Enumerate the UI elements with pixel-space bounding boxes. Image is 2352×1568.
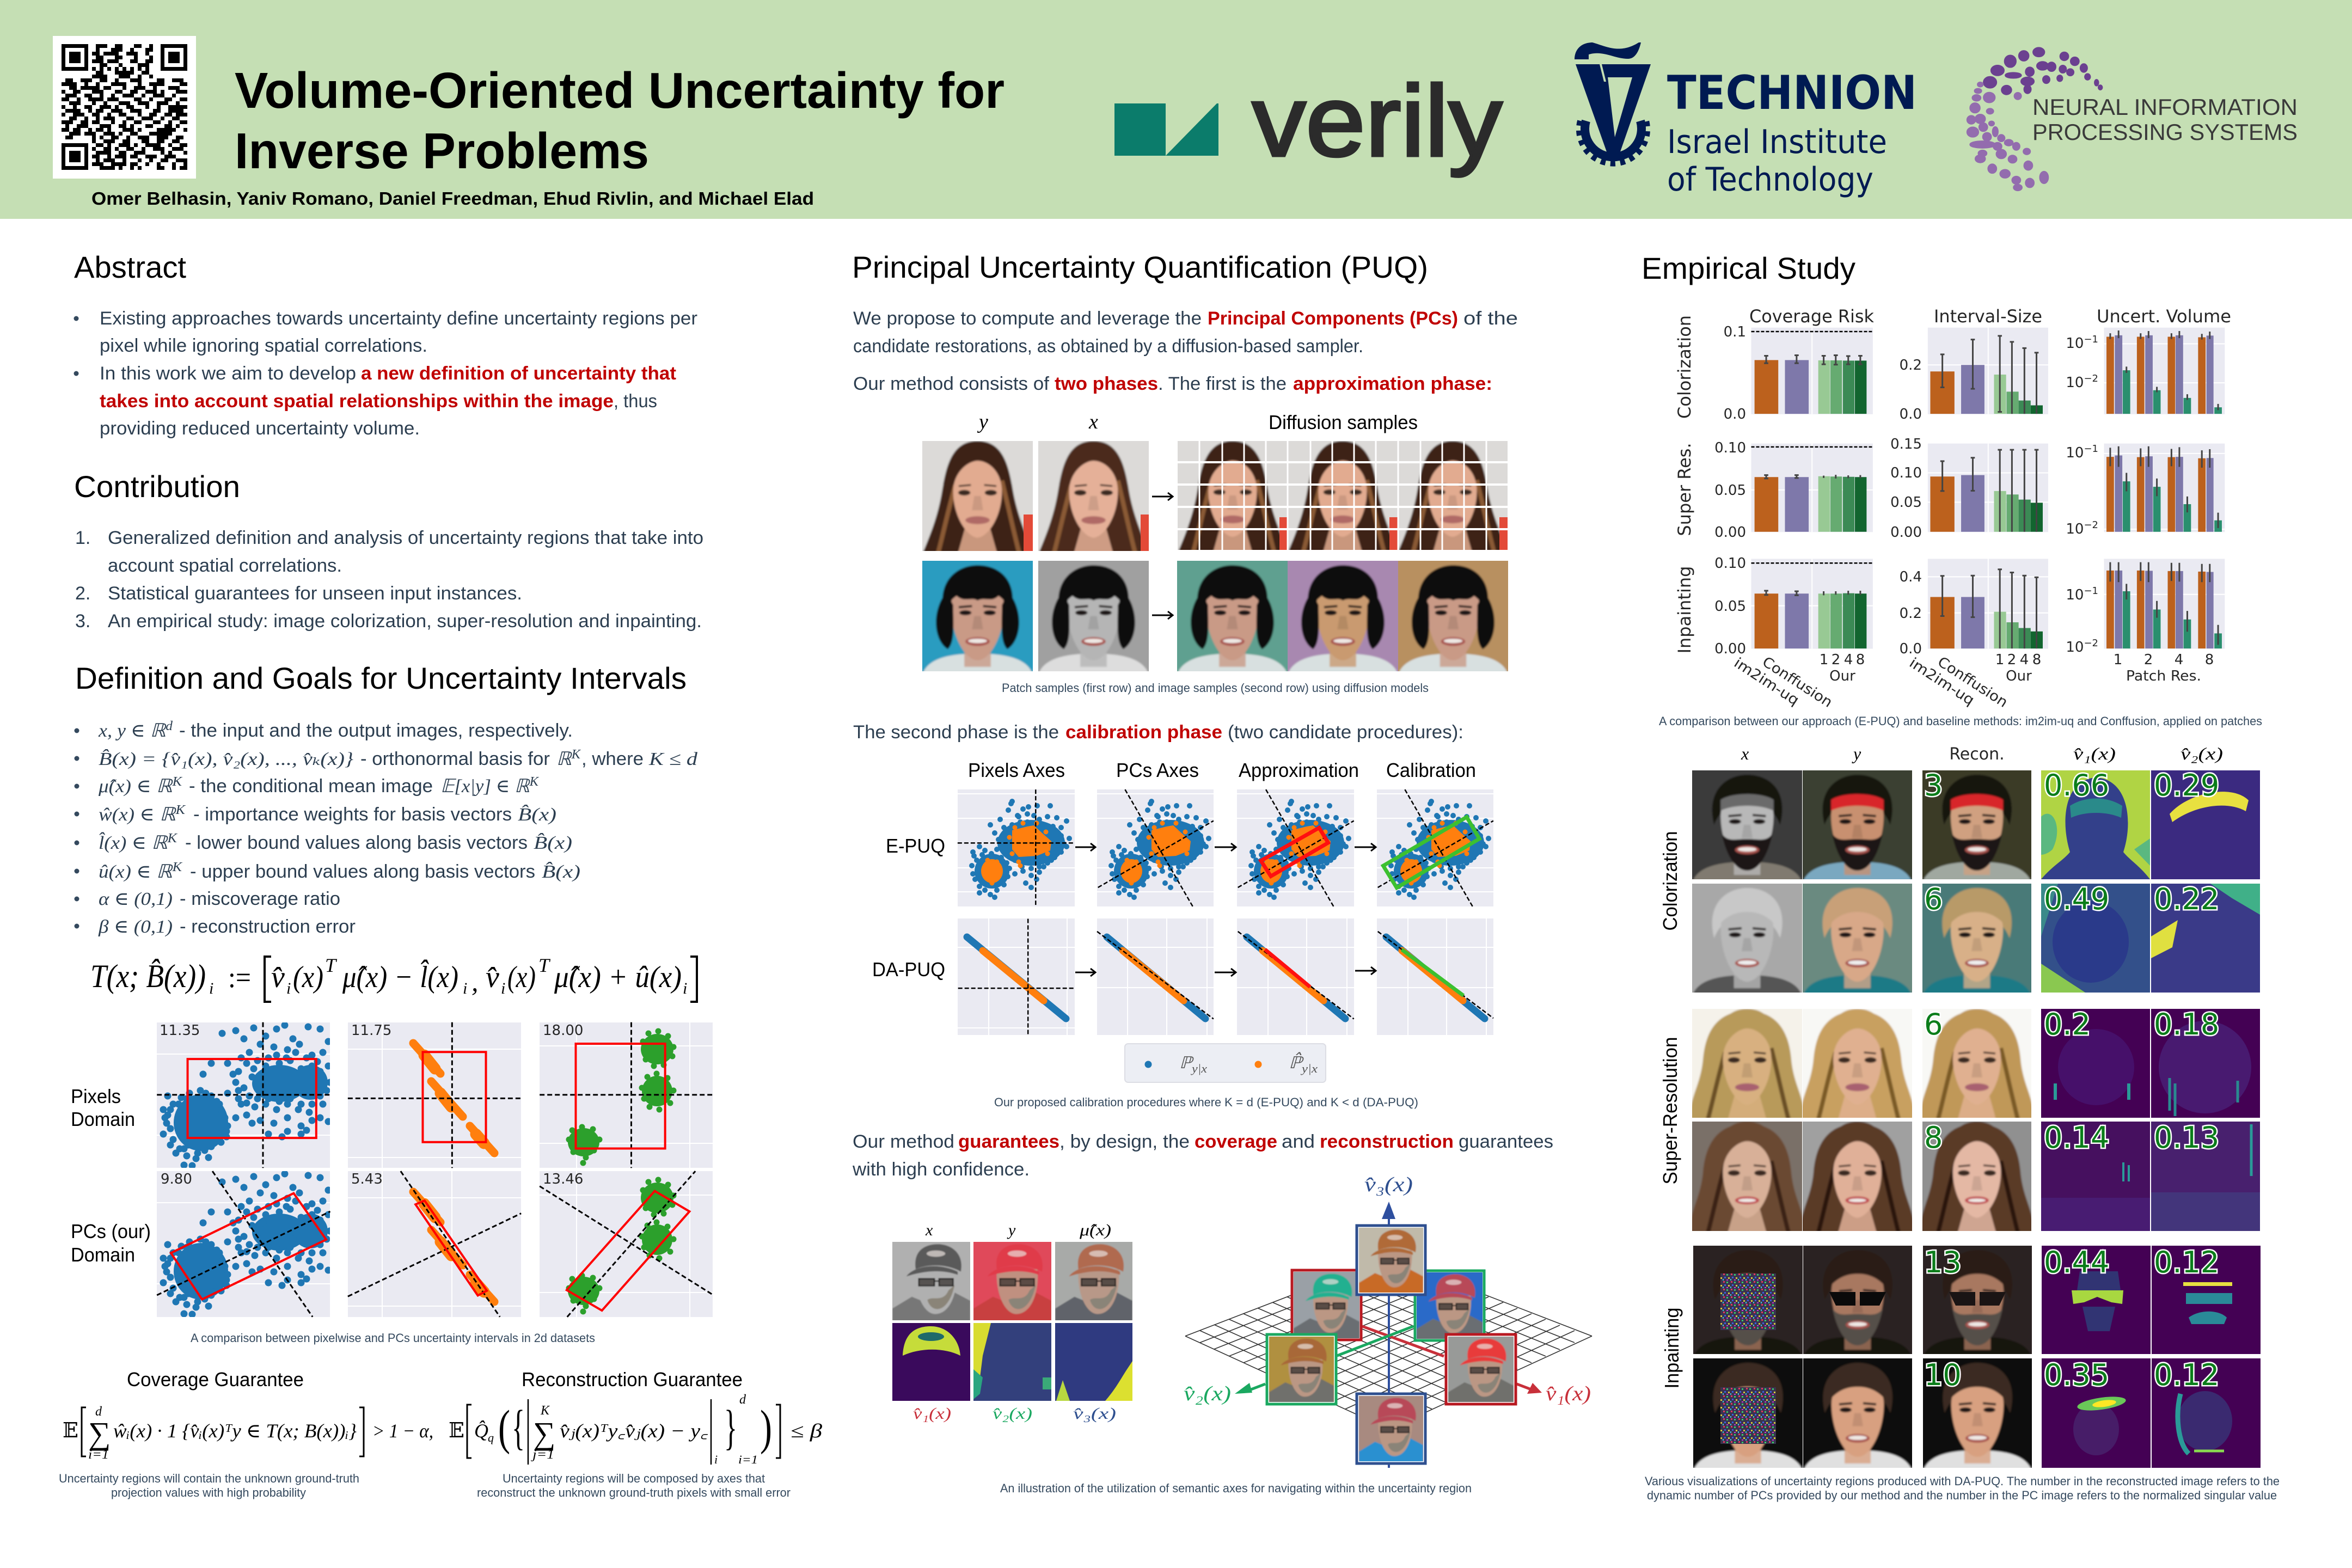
coverage guarantee: i=1 <box>88 1448 109 1462</box>
axis ticks: 0.0 <box>1724 406 1746 422</box>
row labels <box>1659 831 1683 1388</box>
row labels: Colorization <box>1659 831 1681 931</box>
heading: Contribution: Contribution <box>74 469 240 504</box>
axis ticks: 10 <box>2066 375 2084 391</box>
caption: diffusion samples: Patch samples (first row) and image samples (second row) using diffusion models <box>1002 681 1429 695</box>
column titles: Calibration <box>1386 759 1476 781</box>
reconstruction guarantee: } <box>724 1401 737 1455</box>
formula: uncertainty interval: i <box>463 979 467 997</box>
second phase text: calibration phase <box>1065 722 1222 743</box>
column headers <box>1741 744 2223 764</box>
axis labels: v̂₃(x) <box>1364 1173 1413 1196</box>
figure: semantic axes images: x <box>925 1221 933 1239</box>
logo: Technion: TECHNION <box>1667 66 1917 120</box>
overlay numbers: 0.13 <box>2154 1120 2219 1155</box>
definitions list: K ≤ d <box>648 749 698 769</box>
axis ticks: 0.1 <box>1724 324 1746 340</box>
bottom labels: 8 <box>2205 652 2214 668</box>
column labels: Diffusion samples <box>1269 411 1418 433</box>
coverage guarantee: d <box>95 1405 102 1419</box>
definitions list: α ∈ (0,1) <box>99 889 173 909</box>
arrows between panels <box>1075 843 1376 976</box>
formula: uncertainty interval: i <box>286 979 291 997</box>
bottom labels: 4 <box>2175 652 2183 668</box>
second phase text <box>853 722 1463 743</box>
axis labels: v̂₂(x) <box>1184 1382 1231 1405</box>
logo: NeurIPS: NEURAL INFORMATION <box>2032 94 2298 120</box>
definitions list: μ̂(x) ∈ ℝ <box>99 776 166 797</box>
chart: pixels vs PCs scatter grid <box>71 1022 713 1317</box>
contribution list <box>75 528 703 632</box>
guarantee captions: reconstruct the unknown ground-truth pixels with small error <box>477 1486 791 1499</box>
reconstruction guarantee: ( <box>498 1401 510 1455</box>
axis labels: v̂₁(x) <box>1546 1382 1591 1405</box>
abstract text: pixel while ignoring spatial correlations. <box>100 335 427 356</box>
logo: NeurIPS: PROCESSING SYSTEMS <box>2032 119 2298 145</box>
formula: uncertainty interval: v̂ <box>271 960 285 994</box>
overlay numbers: 0.49 <box>2044 882 2109 916</box>
bottom labels: 1 <box>1820 652 1828 668</box>
coverage guarantee: ŵᵢ(x) · 1 {v̂ᵢ(x)ᵀy ∈ T(x; B(x))ᵢ} <box>113 1420 357 1442</box>
caption: calibration <box>994 1095 1418 1109</box>
super-resolution row 1 <box>1689 1006 2260 1121</box>
axis ticks: 0.00 <box>1714 524 1746 541</box>
figure: semantic axes images: μ̂(x) <box>1079 1221 1111 1239</box>
row titles: Super Res. <box>1674 443 1695 536</box>
abstract text: Existing approaches towards uncertainty define uncertainty regions per <box>100 308 697 329</box>
heading: Definition and Goals: Definition and Goals for Uncertainty Intervals <box>75 661 687 695</box>
formula: uncertainty interval: i <box>501 979 505 997</box>
column labels: y <box>977 411 988 433</box>
panel: left column <box>59 250 822 1499</box>
guarantees text: with high confidence. <box>852 1159 1030 1180</box>
axis ticks: 0.00 <box>1890 524 1922 541</box>
overlay numbers: 0.44 <box>2044 1245 2109 1279</box>
axis ticks: 10 <box>2066 521 2084 537</box>
definitions list: - miscoverage ratio <box>180 889 340 909</box>
chart titles: Coverage Risk <box>1749 306 1874 327</box>
axis ticks: 0.0 <box>1900 406 1922 422</box>
bottom labels: 4 <box>1844 652 1853 668</box>
axis ticks: 0.10 <box>1714 555 1746 572</box>
bottom labels: 2 <box>1832 652 1840 668</box>
coverage guarantee: Coverage Guarantee <box>127 1368 304 1391</box>
overlay numbers: 13 <box>1924 1245 1962 1279</box>
axis ticks: 0.10 <box>1890 465 1922 481</box>
guarantees text: guarantees <box>1459 1131 1553 1152</box>
header banner <box>0 0 2352 219</box>
formula: uncertainty interval: μ̂(x) − l̂(x) <box>342 959 458 994</box>
axis ticks: 0.05 <box>1714 482 1746 499</box>
row labels: PCs (our) <box>71 1220 151 1242</box>
photo row 1 <box>919 438 1511 554</box>
definitions list: K <box>571 748 581 762</box>
definitions list: K <box>171 775 183 789</box>
column headers: x <box>1741 744 1749 763</box>
coverage guarantee: > 1 − α, <box>372 1420 433 1442</box>
row labels: Inpainting <box>1661 1308 1683 1388</box>
bottom labels: Conffusion <box>1759 654 1835 711</box>
definitions list: B̂(x) <box>518 804 556 825</box>
caption: DA-PUQ visualizations <box>1645 1474 2280 1502</box>
overlay numbers: 6 <box>1924 1007 1943 1042</box>
caption: calibration: Our proposed calibration procedures where <box>994 1095 1221 1109</box>
arrows <box>1152 493 1173 619</box>
definitions list: , where <box>581 749 644 769</box>
formula: uncertainty interval: T <box>538 954 551 976</box>
definitions list: d <box>166 719 173 733</box>
row labels: Pixels <box>71 1085 121 1107</box>
intro text: candidate restorations, as obtained by a diffusion-based sampler. <box>853 336 1363 357</box>
bottom labels: im2im-uq <box>1906 655 1977 709</box>
panel: middle column <box>852 250 1592 1495</box>
logo: NeurIPS <box>1968 48 2298 190</box>
bottom labels: 1 <box>2114 652 2122 668</box>
guarantees text <box>852 1131 1553 1180</box>
axis ticks: 10 <box>2066 639 2084 656</box>
definitions list: K <box>529 775 540 789</box>
inpainting row 2 <box>1690 1355 2261 1471</box>
definitions list: K <box>167 831 178 846</box>
reconstruction guarantee: j=1 <box>531 1448 554 1462</box>
definitions list: ℝ <box>556 749 571 769</box>
axis ticks: 0.2 <box>1900 357 1922 373</box>
chart: pixels vs PCs scatter grid: 9.80 <box>161 1171 192 1187</box>
bottom labels <box>1731 652 2214 711</box>
abstract text: In this work we aim to develop <box>100 363 356 384</box>
figure: semantic axes images: v̂₁(x) <box>913 1405 951 1423</box>
definitions list: K <box>175 803 186 817</box>
intro text: Principal Components (PCs) <box>1208 308 1458 329</box>
row titles: Inpainting <box>1674 566 1695 653</box>
definitions list: K <box>171 860 183 874</box>
chart titles: Uncert. Volume <box>2097 306 2231 327</box>
definitions list: 𝔼[x|y] ∈ ℝ <box>440 776 528 797</box>
logo: Technion: Israel Institute <box>1667 123 1887 161</box>
axis ticks: −1 <box>2084 334 2098 345</box>
coverage guarantee: ∑ <box>88 1416 111 1451</box>
diagram: uncertainty axes over grid <box>1184 1173 1592 1468</box>
definitions list: - importance weights for basis vectors <box>193 804 512 825</box>
definitions list: - lower bound values along basis vectors <box>185 832 528 853</box>
title: Volume-Oriented Uncertainty for <box>235 62 1004 119</box>
chart: pixels vs PCs scatter grid: 13.46 <box>543 1171 583 1187</box>
axis ticks: 0.00 <box>1714 641 1746 657</box>
definitions list: - the conditional mean image <box>189 776 433 797</box>
row titles <box>1674 315 1695 653</box>
bottom labels: Conffusion <box>1934 654 2011 711</box>
formula: uncertainty interval: := <box>228 961 251 994</box>
guarantee captions: projection values with high probability <box>111 1486 306 1499</box>
definitions list: l̂(x) ∈ ℝ <box>99 833 162 853</box>
reconstruction guarantee: i <box>714 1453 718 1466</box>
abstract text: takes into account spatial relationships within the image <box>100 391 614 412</box>
definitions list: - the input and the output images, respectively. <box>179 720 573 741</box>
overlay numbers: 0.22 <box>2154 882 2219 916</box>
caption: DA-PUQ visualizations: dynamic number of PCs provided by our method and the number in the PC image refers to the normalized singular value <box>1647 1489 2277 1502</box>
contribution list: account spatial correlations. <box>108 555 342 576</box>
second phase text: (two candidate procedures): <box>1228 722 1463 743</box>
reconstruction guarantee: q <box>488 1431 494 1444</box>
axis labels <box>1184 1173 1591 1405</box>
guarantees text: , by design, the <box>1059 1131 1190 1152</box>
overlay numbers: 6 <box>1924 882 1943 916</box>
reconstruction guarantee: K <box>540 1404 550 1418</box>
reconstruction guarantee: 𝔼 <box>449 1419 464 1442</box>
overlay numbers: 0.66 <box>2044 768 2109 803</box>
overlay numbers: 3 <box>1924 768 1943 803</box>
axis ticks: 10 <box>2066 445 2084 461</box>
overlay numbers: 0.12 <box>2154 1358 2219 1392</box>
reconstruction guarantee: ≤ β <box>791 1420 822 1442</box>
guarantee captions: Uncertainty regions will be composed by axes that <box>503 1472 765 1485</box>
logo: Technion: of Technology <box>1667 161 1873 199</box>
reconstruction guarantee: d <box>739 1393 746 1407</box>
QR code <box>53 36 196 179</box>
coverage guarantee <box>63 1368 433 1462</box>
bottom labels: Patch Res. <box>2126 668 2201 684</box>
definitions list: ŵ(x) ∈ ℝ <box>99 805 169 825</box>
overlay numbers: 10 <box>1924 1358 1962 1392</box>
overlay numbers <box>1924 768 2219 1392</box>
chart: pixels vs PCs scatter grid: 11.35 <box>160 1022 200 1039</box>
reconstruction guarantee: ) <box>760 1401 772 1455</box>
column labels <box>977 411 1418 433</box>
bottom labels: 1 <box>1995 652 2004 668</box>
contribution list: An empirical study: image colorization, super-resolution and inpainting. <box>108 611 702 632</box>
formula: uncertainty interval: , <box>471 966 478 997</box>
formula: uncertainty interval: μ̂(x) + û(x) <box>554 960 682 994</box>
column titles <box>968 759 1476 781</box>
caption: DA-PUQ visualizations: Various visualizations of uncertainty regions produced with DA-PUQ. The number in the reconstructed image refers to the <box>1645 1474 2280 1488</box>
column titles: Approximation <box>1239 759 1359 781</box>
column titles: PCs Axes <box>1116 759 1199 781</box>
row labels <box>71 1085 151 1266</box>
overlay numbers: 0.29 <box>2154 768 2219 803</box>
guarantees text: coverage <box>1195 1131 1277 1152</box>
formula: uncertainty interval: i <box>683 979 687 997</box>
legend: ℙ̂ <box>1289 1054 1300 1072</box>
figure: semantic axes images: v̂₃(x) <box>1073 1405 1116 1423</box>
bottom labels: 2 <box>2144 652 2153 668</box>
axis ticks: −2 <box>2084 373 2098 384</box>
contribution list: 3. <box>75 611 90 632</box>
figure: diffusion samples <box>919 411 1511 675</box>
axis ticks: 0.05 <box>1890 494 1922 511</box>
logo: verily <box>1114 65 1503 177</box>
bottom labels: 8 <box>2032 652 2041 668</box>
caption: semantic axes: An illustration of the utilization of semantic axes for navigating within the uncertainty region <box>1000 1481 1472 1495</box>
caption: calibration: K = d (E-PUQ) and K < d (DA-PUQ) <box>1224 1095 1418 1109</box>
row labels: Domain <box>71 1108 135 1130</box>
guarantees text: and <box>1282 1131 1315 1152</box>
axis ticks: 10 <box>2066 335 2084 352</box>
definitions list: - upper bound values along basis vectors <box>190 861 535 882</box>
definitions list: B̂(x) <box>542 861 580 882</box>
formula: uncertainty interval <box>90 954 697 1002</box>
legend <box>1125 1044 1326 1082</box>
guarantee captions <box>59 1472 791 1499</box>
legend: y|x <box>1301 1062 1318 1075</box>
axis ticks: −2 <box>2084 638 2098 649</box>
chart: pixels vs PCs scatter grid: 18.00 <box>543 1022 583 1039</box>
definitions list: B̂(x) <box>534 832 572 853</box>
chart: calibration procedures <box>872 759 1493 1082</box>
contribution list: Statistical guarantees for unseen input instances. <box>108 583 522 604</box>
contribution list: Generalized definition and analysis of uncertainty regions that take into <box>108 528 703 548</box>
heading: PUQ: Principal Uncertainty Quantification (PUQ) <box>852 250 1428 284</box>
definitions list: - reconstruction error <box>180 916 356 937</box>
authors: Omer Belhasin, Yaniv Romano, Daniel Freedman, Ehud Rivlin, and Michael Elad <box>91 188 814 209</box>
guarantees text: Our method <box>853 1131 954 1152</box>
coverage guarantee: 𝔼 <box>63 1419 78 1442</box>
axis ticks: 0.0 <box>1900 641 1922 657</box>
row titles: Colorization <box>1674 315 1695 419</box>
figure: semantic axes images <box>890 1221 1135 1423</box>
intro text: of the <box>1463 308 1518 329</box>
colorization row 1 <box>1689 767 2260 883</box>
bottom labels: Our <box>2006 668 2032 684</box>
axis ticks: 10 <box>2066 587 2084 603</box>
abstract text: a new definition of uncertainty that <box>361 363 676 384</box>
column headers: v̂₂(x) <box>2180 744 2223 763</box>
legend: ℙ <box>1179 1054 1191 1072</box>
colorization row 2 <box>1689 880 2260 996</box>
overlay numbers: 8 <box>1924 1120 1943 1155</box>
heading: Empirical Study: Empirical Study <box>1641 251 1855 285</box>
guarantee captions: Uncertainty regions will contain the unknown ground-truth <box>59 1472 359 1485</box>
formula: uncertainty interval: (x) <box>507 960 536 994</box>
figure: DA-PUQ visualizations <box>1659 744 2261 1471</box>
contribution list: 1. <box>75 528 90 548</box>
bottom labels: Our <box>1829 668 1855 684</box>
intro text: Our method consists of <box>853 373 1050 394</box>
axis ticks: −2 <box>2084 519 2098 531</box>
definitions list: û(x) ∈ ℝ <box>99 862 166 882</box>
formula: uncertainty interval: T <box>325 954 338 976</box>
definitions list: - orthonormal basis for <box>360 749 550 769</box>
axis ticks: 0.2 <box>1900 605 1922 622</box>
bottom labels: 4 <box>2020 652 2029 668</box>
figure: semantic axes images: y <box>1007 1221 1016 1239</box>
definitions list <box>74 719 698 937</box>
row labels: Super-Resolution <box>1659 1037 1681 1185</box>
column titles: Pixels Axes <box>968 759 1065 781</box>
abstract text: providing reduced uncertainty volume. <box>100 418 420 439</box>
intro text <box>853 308 1518 394</box>
image frames <box>1267 1226 1516 1463</box>
column headers: Recon. <box>1949 745 2005 764</box>
chart titles <box>1749 306 2231 327</box>
bar charts grid <box>1674 306 2231 711</box>
panel: right column <box>1641 251 2280 1502</box>
definitions list: x, y ∈ ℝ <box>99 721 162 741</box>
photo row 2 <box>919 558 1511 675</box>
second phase text: The second phase is the <box>853 722 1059 743</box>
row labels: Domain <box>71 1244 135 1266</box>
bottom labels: 8 <box>1856 652 1865 668</box>
intro text: We propose to compute and leverage the <box>853 308 1202 329</box>
reconstruction guarantee: i=1 <box>738 1453 758 1466</box>
reconstruction guarantee: Q̂ <box>474 1420 488 1442</box>
contribution list: 2. <box>75 583 90 604</box>
intro text: . The first is the <box>1158 373 1287 394</box>
reconstruction guarantee: v̂ⱼ(x)ᵀy꜀v̂ⱼ(x) − y꜀ <box>560 1420 708 1442</box>
row labels: DA-PUQ <box>872 958 945 981</box>
abstract text <box>74 308 697 439</box>
reconstruction guarantee <box>449 1368 822 1466</box>
axis ticks: −1 <box>2084 585 2098 597</box>
abstract text: , thus <box>614 391 657 412</box>
legend: y|x <box>1191 1062 1207 1075</box>
guarantees text: reconstruction <box>1320 1131 1454 1152</box>
formula: uncertainty interval: v̂ <box>486 960 499 994</box>
row labels <box>872 835 945 981</box>
logo: verily: verily <box>1252 65 1503 177</box>
column headers: y <box>1852 744 1861 763</box>
formula: uncertainty interval: (x) <box>293 960 323 994</box>
axis ticks <box>1714 324 2098 657</box>
overlay numbers: 0.14 <box>2044 1120 2109 1155</box>
axis ticks: 0.4 <box>1900 569 1922 585</box>
guarantees text: guarantees <box>958 1131 1059 1152</box>
figure: semantic axes images: v̂₂(x) <box>993 1405 1032 1423</box>
chart titles: Interval-Size <box>1934 306 2042 327</box>
bottom labels: im2im-uq <box>1731 655 1802 709</box>
axis ticks: −1 <box>2084 443 2098 455</box>
intro text: two phases <box>1055 373 1158 394</box>
reconstruction guarantee: Reconstruction Guarantee <box>522 1368 743 1391</box>
caption: bar charts: A comparison between our approach (E-PUQ) and baseline methods: im2im-uq and Conffusion, applied on patches <box>1659 714 2262 728</box>
bottom labels: 2 <box>2007 652 2016 668</box>
formula: uncertainty interval: i <box>209 979 213 997</box>
logo: Technion <box>1575 42 1917 199</box>
definitions list: B̂(x) = {v̂₁(x), v̂₂(x), ..., v̂ₖ(x)} <box>99 749 353 769</box>
overlay numbers: 0.2 <box>2044 1007 2091 1042</box>
axis ticks: 0.10 <box>1714 440 1746 456</box>
caption: scatter grid: A comparison between pixelwise and PCs uncertainty intervals in 2d datasets <box>191 1331 595 1345</box>
reconstruction guarantee: ∑ <box>533 1416 555 1451</box>
inpainting row 1 <box>1690 1242 2261 1357</box>
axis ticks: 0.15 <box>1890 436 1922 452</box>
super-resolution row 2 <box>1689 1118 2260 1234</box>
row labels: E-PUQ <box>886 835 945 857</box>
overlay numbers: 0.18 <box>2154 1007 2219 1042</box>
chart: pixels vs PCs scatter grid: 11.75 <box>351 1022 391 1039</box>
reconstruction guarantee: { <box>512 1401 525 1455</box>
overlay numbers: 0.12 <box>2154 1245 2219 1279</box>
title: Inverse Problems <box>235 122 649 179</box>
column labels: x <box>1088 411 1098 433</box>
definitions list: β ∈ (0,1) <box>98 917 173 937</box>
intro text: approximation phase: <box>1293 373 1492 394</box>
overlay numbers: 0.35 <box>2044 1358 2109 1392</box>
chart: pixels vs PCs scatter grid: 5.43 <box>351 1171 383 1187</box>
heading: Abstract: Abstract <box>74 250 186 284</box>
column headers: v̂₁(x) <box>2073 744 2116 763</box>
title <box>235 62 1004 179</box>
axis ticks: 0.05 <box>1714 598 1746 615</box>
formula: uncertainty interval: T(x; B̂(x)) <box>90 958 206 994</box>
